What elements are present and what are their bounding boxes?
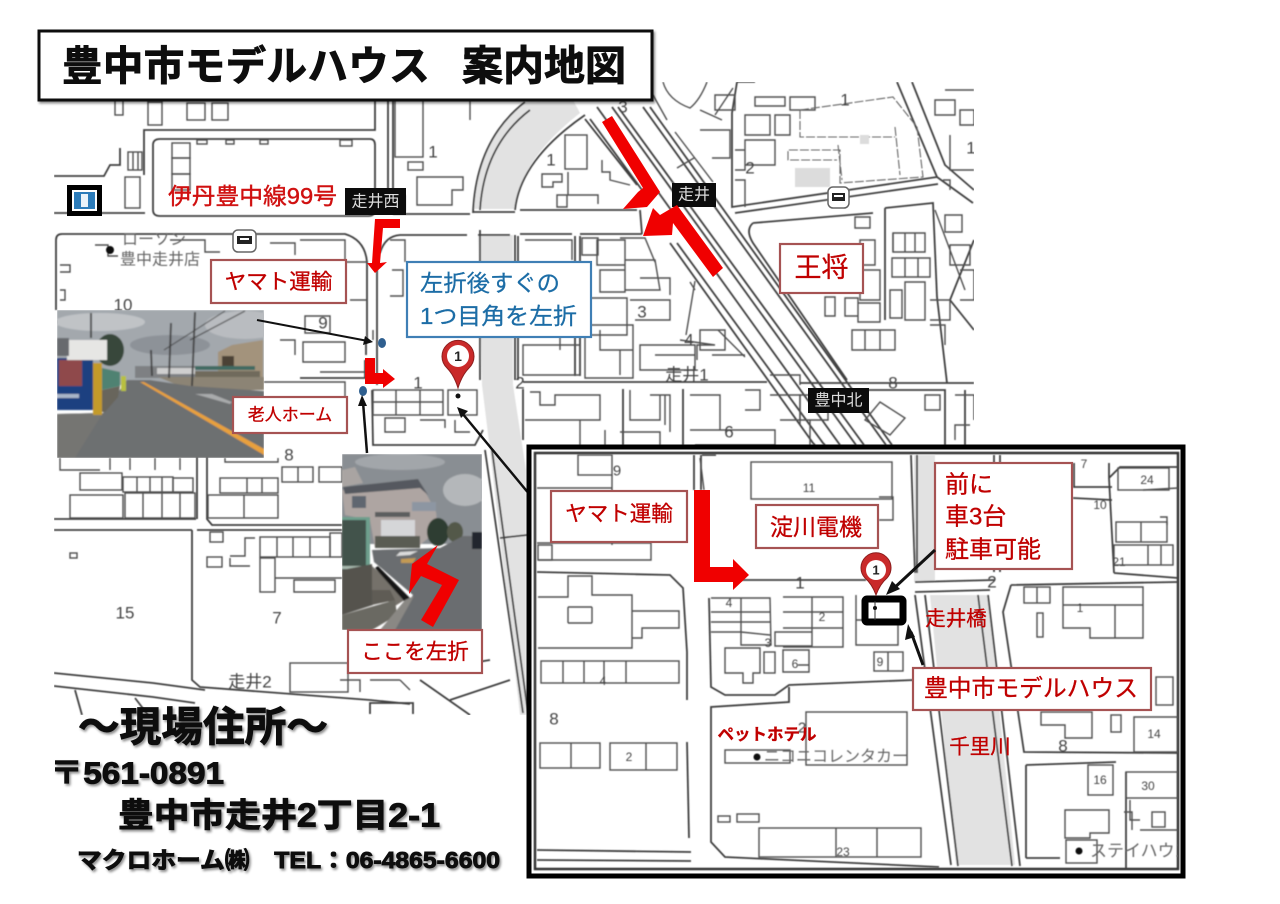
arrow: photo 1 to marker (257, 320, 373, 345)
house number labels: 8 (1058, 736, 1068, 756)
road and town numbers: 3 (637, 302, 647, 322)
label: 豊中市モデルハウス: 豊中市モデルハウス (924, 676, 1138, 702)
photo: corner where to turn left (342, 454, 487, 630)
icon: bus stop west (233, 230, 256, 252)
place: ステイハウス: ステイハウス (1090, 842, 1192, 860)
house number labels: 1 (795, 574, 805, 592)
yellow post (93, 363, 102, 415)
house number labels: 9 (613, 462, 621, 480)
road paint (396, 551, 418, 556)
road and town numbers: 6 (724, 422, 734, 442)
station label: 豊中北: 豊中北 (814, 392, 863, 410)
road and town numbers: 8 (284, 446, 294, 464)
inset map drawing (537, 455, 1192, 869)
label: 走井橋: 走井橋 (925, 608, 987, 630)
photo: road view toward the turn (55, 310, 285, 458)
station label: 走井西 (345, 188, 406, 215)
house number labels: 2 (798, 720, 806, 736)
location pin 1 on main map: 1 (454, 348, 462, 364)
house number labels: 3 (765, 636, 772, 650)
green fence and wall (102, 368, 120, 390)
road and town numbers: 1 (840, 90, 850, 110)
road and town numbers: 10 (114, 296, 132, 314)
label: ヤマト運輸: ヤマト運輸 (225, 270, 333, 294)
arrow: model house label to house (905, 624, 923, 665)
label: 淀川電機: 淀川電機 (770, 514, 862, 540)
text: company and telephone: マクロホーム㈱ TEL：06-4865-6600 (77, 847, 500, 873)
icon: Toyonaka badge (67, 185, 102, 216)
road surface (57, 380, 264, 458)
main area map (54, 82, 976, 715)
utility poles (91, 311, 245, 386)
heading: site address: ～現場住所～ (78, 704, 328, 750)
callout: turn instructions: 左折後すぐの (420, 270, 560, 296)
house highlight box (865, 599, 903, 622)
house number labels: 11 (803, 481, 816, 495)
house number labels: 9 (877, 655, 884, 669)
concrete wall and step (342, 564, 373, 615)
house number labels: 23 (836, 845, 850, 859)
far buildings (135, 366, 195, 378)
label: ここを左折 (348, 630, 482, 673)
title: 案内地図 (462, 43, 626, 89)
arrow: left turn toward model house (365, 358, 395, 388)
house number labels: 21 (1112, 555, 1126, 569)
house number labels: 24 (1140, 473, 1154, 487)
road (372, 536, 482, 630)
callout: parking for three cars: 車3台 (945, 504, 1006, 530)
pedestrian in hi-vis vest (121, 376, 126, 391)
road and town numbers: 1 (546, 150, 556, 170)
road and town numbers: 走井1 (665, 366, 709, 384)
arrow: house to detail inset (457, 407, 530, 495)
road network (54, 82, 974, 715)
label: ペットホテル: ペットホテル (718, 725, 816, 744)
river band (473, 100, 580, 715)
railway lines (585, 107, 892, 445)
marker: photo point 1 (378, 338, 386, 348)
title: 豊中市モデルハウス (62, 43, 430, 89)
text: postal code: 〒561-0891 (50, 756, 224, 790)
label: 豊中市モデルハウス (913, 668, 1151, 710)
green fence (342, 519, 367, 571)
road and town numbers: 走井2 (228, 672, 272, 692)
road and town numbers: 1 (428, 142, 438, 162)
vending machine (57, 358, 93, 410)
house number labels: 8 (549, 710, 559, 728)
arrow: turn at 走井西 (367, 219, 400, 273)
arrow: parking note to house (886, 550, 935, 595)
label: 王将 (780, 244, 863, 293)
label: 淀川電機 (756, 505, 878, 548)
sky (342, 454, 482, 544)
arrow: route turn in inset (694, 490, 749, 590)
house number labels: 14 (1147, 727, 1161, 741)
buildings west (60, 82, 477, 692)
plants (375, 536, 420, 548)
house number labels: 2 (819, 610, 826, 624)
buildings east (700, 82, 974, 445)
road and town numbers: 8 (888, 374, 898, 392)
arrow: route from south on rail road (643, 205, 723, 277)
label: ここを左折: ここを左折 (361, 640, 469, 664)
road and town numbers: 1 (413, 374, 423, 392)
white ground floor wall (381, 520, 415, 540)
house number labels: 10 (1093, 498, 1107, 512)
label: 千里川: 千里川 (949, 736, 1011, 758)
station label: 豊中北 (808, 388, 869, 413)
road and town numbers: 1 (966, 138, 976, 158)
callout: turn instructions (407, 262, 591, 337)
road name: 伊丹豊中線99号: 伊丹豊中線99号 (168, 183, 337, 209)
road and town numbers: 7 (272, 608, 282, 628)
road and town numbers: 4 (684, 330, 694, 350)
orange centre line (140, 382, 264, 455)
road and town numbers: 15 (116, 604, 134, 622)
marker: photo point 2 (359, 386, 367, 396)
roof (343, 479, 428, 495)
house number labels: 4 (726, 596, 733, 610)
house number labels: 2 (987, 572, 997, 592)
label: 老人ホーム: 老人ホーム (248, 406, 332, 424)
station label: 走井西: 走井西 (351, 192, 400, 210)
road and town numbers: 9 (318, 314, 328, 332)
white road marking (195, 394, 232, 404)
location pin 1 on inset (861, 553, 891, 595)
balcony and windows (412, 502, 436, 511)
right building with green canopy (218, 340, 263, 380)
callout: parking for three cars (935, 463, 1072, 569)
place: ニコニコレンタカー: ニコニコレンタカー (764, 748, 908, 766)
station label: 走井: 走井 (678, 186, 710, 204)
panel: detail inset map (529, 447, 1192, 876)
road and town numbers (114, 90, 976, 692)
title (39, 31, 652, 100)
road edge (380, 596, 414, 630)
label: ヤマト運輸 inset (551, 491, 687, 542)
callout: parking for three cars: 駐車可能 (945, 536, 1041, 564)
callout: turn instructions: 1つ目角を左折 (420, 303, 577, 329)
arrow: photo 2 to marker (358, 395, 367, 453)
label: 老人ホーム (233, 397, 347, 433)
house number labels: 4 (600, 674, 607, 688)
label: ヤマト運輸 (211, 260, 346, 303)
icon: bus stop east (828, 187, 849, 208)
road and town numbers: 2 (515, 374, 525, 392)
location pin 1 on main map (442, 340, 474, 398)
arrow: left turn (409, 545, 459, 627)
road and town numbers: 2 (745, 158, 755, 178)
buildings central (523, 135, 800, 445)
callout: parking for three cars: 前に (945, 472, 993, 498)
house number labels: 6 (792, 657, 799, 671)
main house wall (342, 488, 437, 546)
Lawson store: 豊中走井店 (120, 250, 200, 268)
tree and sign board (96, 334, 124, 366)
road and town numbers: 3 (618, 98, 628, 116)
text: street address: 豊中市走井2丁目2-1 (118, 796, 440, 834)
house number labels: 2 (626, 750, 633, 764)
house number labels: 30 (1141, 779, 1155, 793)
label: ヤマト運輸 inset: ヤマト運輸 (565, 502, 673, 526)
house number labels: 1 (1077, 601, 1084, 615)
roads and river banks (911, 455, 1020, 866)
wall along road (158, 377, 264, 390)
house number labels: 16 (1093, 773, 1107, 787)
station label: 走井 (672, 183, 716, 207)
sky (57, 310, 264, 385)
Lawson store (106, 232, 200, 268)
buildings (578, 455, 612, 475)
parked van (472, 532, 482, 549)
house number labels (549, 457, 1161, 859)
Lawson store: ローソン (122, 232, 186, 248)
location pin 1 on inset: 1 (872, 562, 880, 578)
house number labels: 7 (1081, 457, 1088, 471)
arrow: route from north on rail road (602, 116, 660, 209)
river (914, 455, 1015, 865)
label: 王将: 王将 (794, 253, 848, 283)
back house (342, 467, 363, 487)
